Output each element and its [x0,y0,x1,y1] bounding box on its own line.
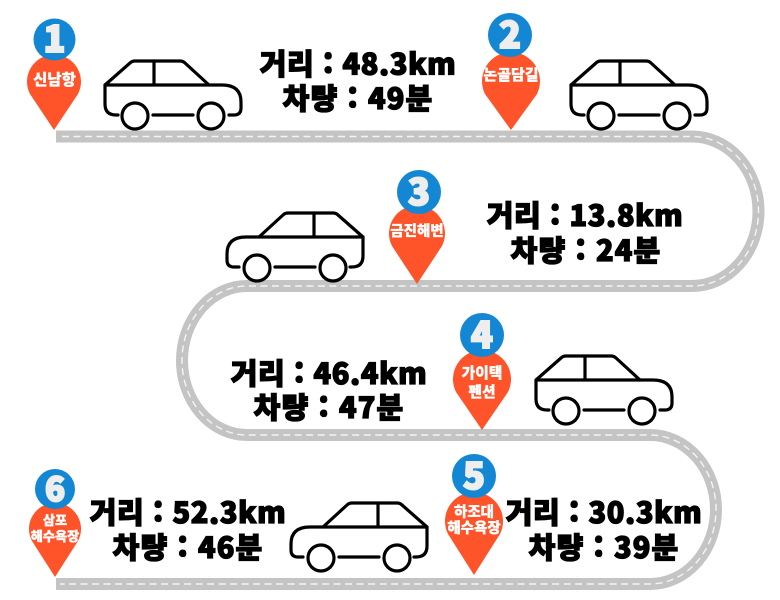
pin 3: 금진해변 [389,164,445,284]
car 2 [571,61,707,129]
pin 3: 금진해변: 금진해변 [390,220,444,241]
info 2 [487,193,683,270]
info 6: 차량 : 46분 [113,525,263,567]
info 3: 거리 : 46.4km [231,351,427,393]
pin 4: 가이택 펜션: 4 [471,307,493,359]
road [56,136,758,584]
pin 6: 삼포 해수욕장: 삼포 [43,510,67,529]
info 5: 거리 : 30.3km [506,490,702,532]
pin 6: 삼포 해수욕장: 6 [45,463,65,511]
pin 2: 논골담길: 2 [499,7,521,59]
car 5 [291,503,427,571]
info 1 [260,42,456,118]
pin 6: 삼포 해수욕장 [29,463,81,577]
pin 5: 하조대 해수욕장 [445,448,503,575]
pin 5: 하조대 해수욕장: 하조대 [454,501,494,522]
pin 2: 논골담길 [482,7,540,130]
pin 3: 금진해변: 3 [408,164,430,216]
pin 4: 가이택 펜션: 펜션 [468,381,496,402]
info 5: 차량 : 39분 [529,525,679,567]
pin 6: 삼포 해수욕장: 해수욕장 [31,526,79,545]
car 3 [227,213,363,281]
pin 1: 신남항 [27,11,81,130]
info 6 [90,490,286,567]
car 4 [536,356,672,424]
info 6: 거리 : 52.3km [90,490,286,532]
pin 5: 하조대 해수욕장: 5 [463,448,485,500]
pin 2: 논골담길: 논골담길 [483,64,539,85]
info 3: 차량 : 47분 [254,385,404,427]
info 1: 거리 : 48.3km [260,42,456,84]
pin 1: 신남항: 1 [44,11,65,63]
info 2: 차량 : 24분 [511,228,661,270]
car 1 [105,61,241,129]
info 3 [231,351,427,427]
info 5 [506,490,702,567]
pin 5: 하조대 해수욕장: 해수욕장 [447,517,501,538]
pin 1: 신남항: 신남항 [33,68,76,90]
pin 4: 가이택 펜션: 가이택 [462,362,502,383]
info 1: 차량 : 49분 [283,76,433,118]
pin 4: 가이택 펜션 [453,307,511,430]
info 2: 거리 : 13.8km [487,193,683,235]
